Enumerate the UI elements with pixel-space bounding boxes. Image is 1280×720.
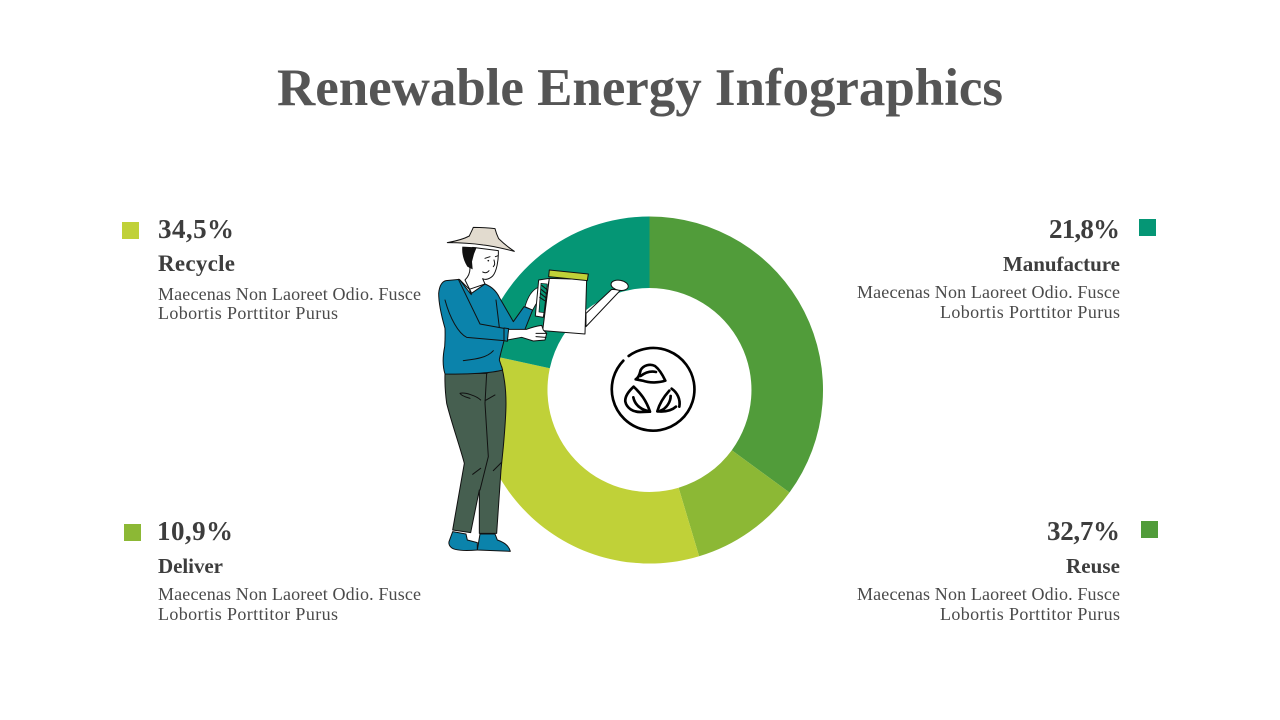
heading: Deliver <box>158 554 223 578</box>
value: 21,8% <box>1049 214 1120 244</box>
cuff <box>504 328 509 341</box>
description <box>857 584 1120 624</box>
legend square <box>1139 219 1156 236</box>
description: Lobortis Porttitor Purus <box>940 604 1120 624</box>
lower hand <box>507 325 547 341</box>
item: manufacture <box>857 214 1156 322</box>
description <box>158 584 421 624</box>
hat <box>447 227 514 251</box>
description: Lobortis Porttitor Purus <box>158 604 338 624</box>
sweater folds and collar <box>445 279 504 361</box>
value: 10,9% <box>157 516 233 546</box>
legend square <box>1141 521 1158 538</box>
description: Maecenas Non Laoreet Odio. Fusce <box>158 284 421 304</box>
hair <box>462 247 477 269</box>
head and neck <box>465 247 498 293</box>
description: Maecenas Non Laoreet Odio. Fusce <box>857 584 1120 604</box>
description: Lobortis Porttitor Purus <box>940 302 1120 322</box>
item: reuse <box>857 516 1158 624</box>
upper hand <box>525 287 545 310</box>
sweater <box>439 279 533 374</box>
segment: deliver 10,9% <box>679 450 790 556</box>
segment: recycle 34,5% <box>476 353 699 564</box>
icon: recycling leaves <box>612 348 694 431</box>
description <box>857 282 1120 322</box>
donut chart <box>476 216 823 564</box>
value: 34,5% <box>158 214 234 244</box>
face details <box>483 256 498 273</box>
legend square <box>122 222 139 239</box>
value: 32,7% <box>1047 516 1120 546</box>
item: recycle <box>122 214 421 323</box>
heading: Manufacture <box>1003 252 1120 276</box>
description <box>158 284 421 323</box>
title: Renewable Energy Infographics <box>277 59 1003 117</box>
segment: manufacture 21,8% <box>480 216 650 368</box>
illustration: farmer holding watering can <box>439 227 629 551</box>
segment: reuse 32,7% <box>650 216 823 492</box>
description: Maecenas Non Laoreet Odio. Fusce <box>158 584 421 604</box>
can handle <box>535 278 549 317</box>
item: deliver <box>124 516 421 624</box>
shoes <box>449 532 510 551</box>
watering can spout <box>586 289 621 327</box>
heading: Recycle <box>158 251 235 276</box>
description: Maecenas Non Laoreet Odio. Fusce <box>857 282 1120 302</box>
legend square <box>124 524 141 541</box>
can lid <box>549 270 588 281</box>
heading: Reuse <box>1066 554 1120 578</box>
trousers <box>445 367 506 533</box>
can body <box>543 278 587 334</box>
description: Lobortis Porttitor Purus <box>158 303 338 323</box>
watering can rose <box>610 279 629 292</box>
